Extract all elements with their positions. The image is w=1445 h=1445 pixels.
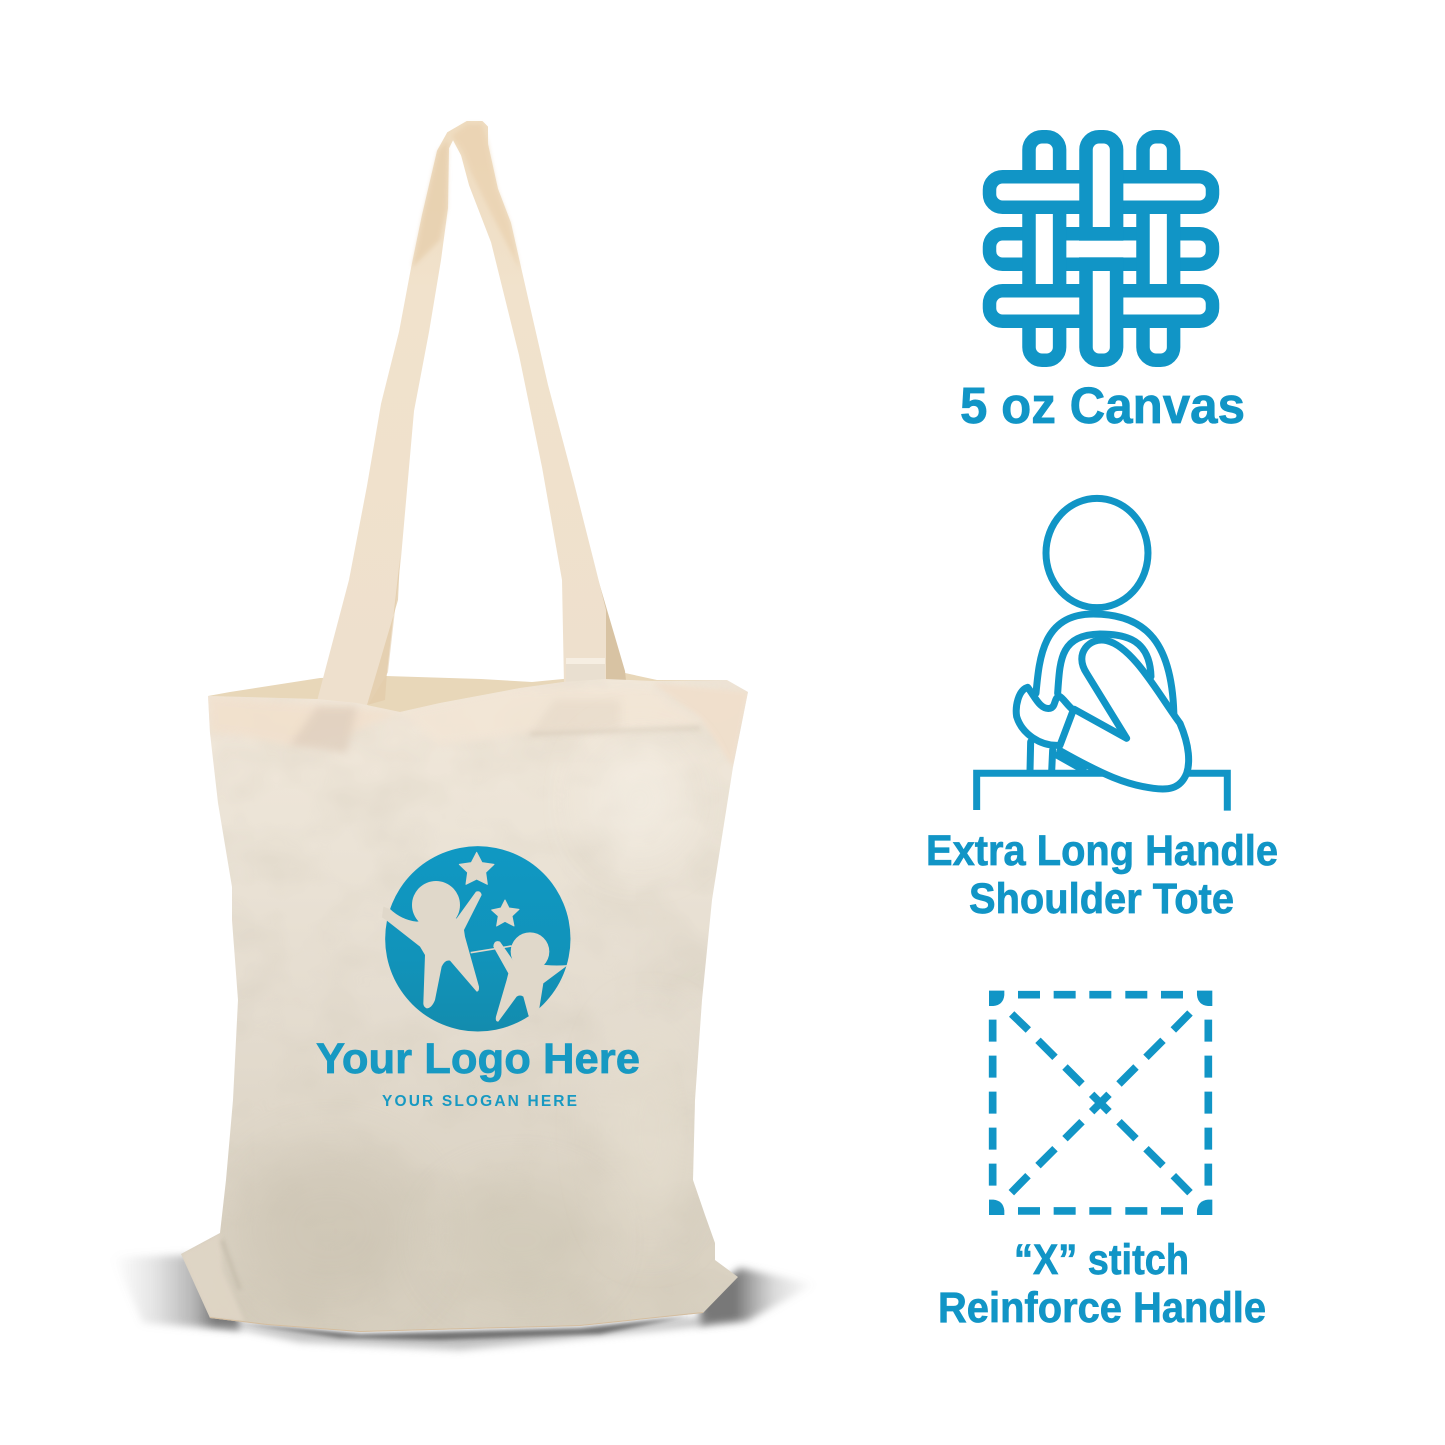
ground shadow bbox=[113, 1254, 815, 1350]
icon: canvas weave bbox=[990, 137, 1212, 360]
label: Extra Long Handle Shoulder Tote bbox=[926, 827, 1278, 923]
label: X stitch Reinforce Handle bbox=[938, 1236, 1266, 1332]
label: Extra Long Handle Shoulder Tote: Shoulder Tote bbox=[969, 875, 1234, 923]
label: 5 oz Canvas: 5 oz Canvas bbox=[960, 377, 1245, 434]
label: Extra Long Handle Shoulder Tote: Extra Long Handle bbox=[926, 827, 1278, 875]
logo bbox=[316, 846, 640, 1110]
strap shading bbox=[367, 124, 605, 705]
small child figure bbox=[493, 932, 568, 1022]
large child figure bbox=[382, 881, 482, 1008]
fabric shading bbox=[196, 684, 748, 1332]
star small bbox=[492, 900, 519, 926]
handle strap bbox=[317, 122, 605, 705]
bag body bbox=[181, 679, 748, 1332]
label: X stitch Reinforce Handle: “X” stitch bbox=[1014, 1236, 1189, 1284]
star large bbox=[459, 852, 494, 884]
back handle edge bbox=[570, 483, 627, 690]
logo mark bbox=[382, 846, 570, 1031]
icon: shoulder tote person bbox=[977, 498, 1227, 811]
icon: X stitch square bbox=[989, 991, 1212, 1215]
logo name: Your Logo Here bbox=[316, 1035, 640, 1083]
line between children bbox=[471, 946, 512, 953]
logo slogan: YOUR SLOGAN HERE bbox=[382, 1093, 577, 1110]
label: X stitch Reinforce Handle: Reinforce Handle bbox=[938, 1284, 1266, 1332]
bag interior bbox=[208, 673, 727, 730]
tote bag photo bbox=[113, 122, 815, 1350]
